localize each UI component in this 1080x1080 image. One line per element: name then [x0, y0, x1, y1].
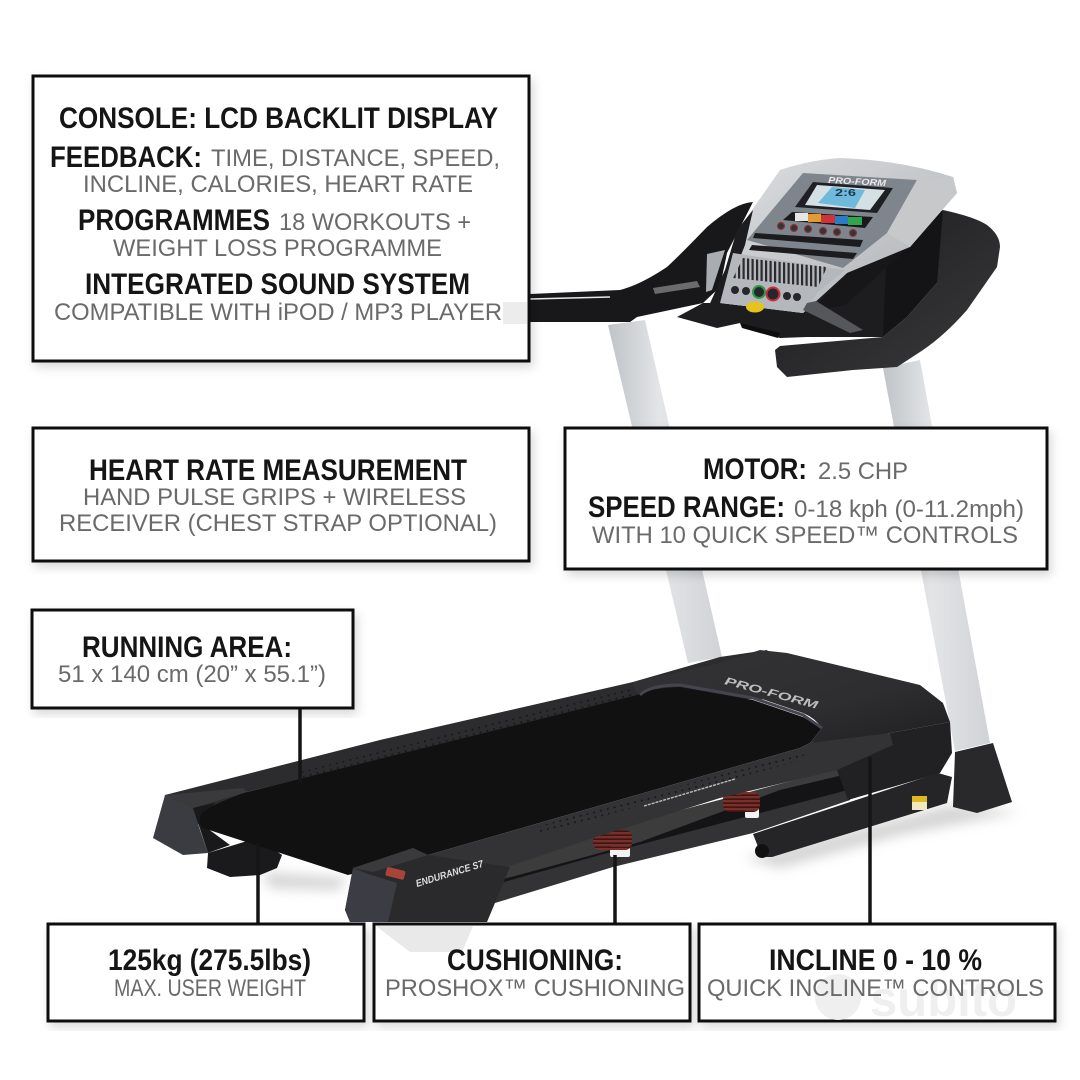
panel: running area [32, 610, 353, 708]
panel: cushioning [374, 924, 690, 1021]
treadmill illustration [153, 158, 1020, 922]
heart rate details [59, 484, 497, 537]
left metal grip [653, 281, 700, 294]
hood trim [640, 685, 822, 728]
cushioning heading: CUSHIONING: [447, 944, 623, 977]
feedback text [50, 141, 500, 198]
leader lines [258, 708, 870, 923]
incline detail: QUICK INCLINE™ CONTROLS [707, 975, 1044, 1002]
feedback text: INCLINE, CALORIES, HEART RATE [83, 171, 473, 198]
heart rate details: RECEIVER (CHEST STRAP OPTIONAL) [59, 510, 497, 537]
motor hood [633, 650, 950, 743]
console wordmark: PRO-FORM [828, 175, 887, 188]
right post base [953, 743, 1012, 813]
sound system text [54, 268, 502, 326]
front side rail [428, 733, 893, 872]
lower frame bar [490, 790, 850, 903]
feedback text: TIME, DISTANCE, SPEED, [211, 145, 500, 172]
ring buttons [778, 222, 856, 236]
panel: incline [699, 924, 1055, 1027]
console shell [720, 158, 957, 313]
right cushion spring [723, 792, 760, 818]
quick speed and incline button rows [749, 233, 863, 259]
panel: motor and speed [565, 428, 1047, 569]
model label: ENDURANCE S7 [415, 859, 485, 890]
LCD display [795, 182, 893, 213]
programmes text: 18 WORKOUTS + [279, 209, 471, 236]
right upright post [883, 360, 990, 751]
hood wordmark: PRO-FORM [723, 675, 820, 712]
LCD display: 2:6 [835, 188, 857, 199]
control buttons [731, 286, 801, 301]
transport wheel [755, 844, 769, 858]
console centre panel [747, 173, 917, 268]
console vent [740, 323, 780, 338]
rail label [644, 779, 735, 806]
sound system text: COMPATIBLE WITH iPOD / MP3 PLAYER [54, 299, 502, 326]
cushioning detail: PROSHOX™ CUSHIONING [385, 975, 685, 1002]
left inner panel [706, 250, 725, 292]
far rail dots [300, 686, 637, 782]
left cushion spring [593, 830, 632, 857]
feedback text: FEEDBACK: [50, 141, 202, 174]
programmes text: WEIGHT LOSS PROGRAMME [113, 235, 442, 262]
console heading: CONSOLE: LCD BACKLIT DISPLAY [59, 102, 498, 135]
motor text: 2.5 CHP [818, 458, 908, 485]
right inner panel [843, 210, 943, 337]
speed range text: SPEED RANGE: [588, 491, 785, 524]
speed range text: WITH 10 QUICK SPEED™ CONTROLS [592, 522, 1018, 549]
running area size: 51 x 140 cm (20” x 55.1”) [58, 661, 326, 688]
belt [200, 687, 822, 875]
speed range text: 0-18 kph (0-11.2mph) [794, 496, 1024, 523]
safety key [746, 302, 764, 312]
logo badge [385, 867, 406, 880]
console base [677, 237, 887, 338]
front rail dots [540, 752, 808, 834]
rear left cap [153, 788, 247, 855]
programmes text: PROGRAMMES [78, 204, 270, 237]
heart rate details: HAND PULSE GRIPS + WIRELESS [83, 484, 466, 511]
transport leg [753, 773, 952, 857]
right frame block [837, 722, 952, 800]
panel: heart rate [33, 428, 529, 561]
weight value: 125kg (275.5lbs) [108, 944, 311, 977]
speaker mesh [887, 177, 957, 247]
opening under rail [500, 768, 850, 888]
watermark: subito [870, 971, 1017, 1027]
left upright post [608, 320, 722, 663]
floor shadows [262, 805, 1020, 890]
running area heading: RUNNING AREA: [82, 631, 292, 664]
right handlebar [775, 210, 1000, 377]
dark console neck [707, 210, 753, 310]
lower silver panel [720, 253, 845, 313]
speed range text [588, 491, 1024, 549]
incline heading: INCLINE 0 - 10 % [769, 944, 982, 977]
panel: console features [33, 76, 529, 361]
motor text: MOTOR: [703, 453, 807, 486]
handlebar highlight [530, 297, 610, 299]
console grey patch [503, 302, 527, 324]
programmes text [78, 204, 471, 262]
heart rate heading: HEART RATE MEASUREMENT [89, 454, 467, 487]
pulse grip [803, 301, 863, 333]
far side rail [165, 650, 800, 830]
panel: max user weight [48, 924, 364, 1021]
rear foot [207, 838, 282, 877]
colour keys [783, 212, 873, 228]
dark frame stripe [500, 775, 848, 888]
front corner cap [345, 848, 510, 922]
warning label [912, 796, 927, 810]
weight label: MAX. USER WEIGHT [114, 975, 306, 1002]
left handlebar [530, 202, 753, 322]
speaker grille [733, 258, 827, 287]
pillar reflection [376, 926, 473, 952]
sound system text: INTEGRATED SOUND SYSTEM [85, 268, 470, 301]
right console side [810, 237, 903, 312]
motor text [703, 453, 908, 486]
